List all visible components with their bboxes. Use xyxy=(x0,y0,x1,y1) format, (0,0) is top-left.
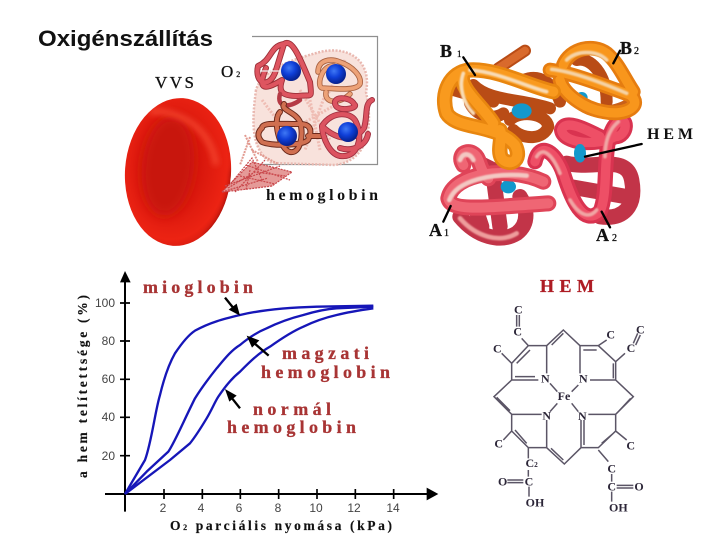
atoms: C xyxy=(525,474,533,488)
atoms: OH xyxy=(609,500,628,514)
chain: A2 xyxy=(535,121,625,216)
chain: A back xyxy=(460,163,633,238)
icon: red blood cell xyxy=(124,98,232,246)
x tick labels: 10 xyxy=(309,501,323,515)
atoms: N xyxy=(578,409,587,423)
wire tangle xyxy=(222,135,292,192)
x axis title: O 2 parciális nyomása (kPa) xyxy=(170,518,392,533)
atoms: O xyxy=(634,480,644,494)
atoms: C2 xyxy=(526,456,538,470)
atoms: Fe xyxy=(558,389,571,403)
atoms: N xyxy=(541,372,550,386)
chain: orange back xyxy=(453,51,633,137)
atoms: N xyxy=(579,372,588,386)
O2 pointer line xyxy=(260,70,291,72)
chart: oxygen dissociation curves xyxy=(75,271,438,533)
curve label: normal hemoglobin xyxy=(227,399,356,437)
y tick labels: 20 xyxy=(102,449,115,463)
bonds xyxy=(494,315,640,502)
atoms: C xyxy=(513,325,522,339)
curve label: normal hemoglobin: normál xyxy=(253,399,331,419)
title: Oxigénszállítás xyxy=(38,26,213,51)
chain: B2 xyxy=(550,48,635,113)
atoms: O xyxy=(498,474,507,488)
label pointers xyxy=(443,51,642,227)
diagram: tetrameric hemoglobin ribbon xyxy=(443,48,642,238)
atoms: C xyxy=(493,342,502,356)
x tick labels xyxy=(160,501,400,515)
heme: pointed xyxy=(574,144,586,163)
x tick labels: 8 xyxy=(275,501,282,515)
curves xyxy=(125,306,373,494)
curve label: normal hemoglobin: hemoglobin xyxy=(227,417,356,437)
atoms: C xyxy=(627,341,635,355)
x tick labels: 2 xyxy=(160,501,167,515)
label: HEM (ribbon): HEM xyxy=(647,126,693,143)
atoms: N xyxy=(542,408,551,422)
atoms: C xyxy=(606,328,615,342)
axes xyxy=(105,271,438,512)
y tick labels xyxy=(95,296,115,463)
y tick labels: 100 xyxy=(95,296,115,310)
diagram: heme structural formula xyxy=(493,303,645,514)
mesh backdrop xyxy=(253,50,369,165)
heading: HEM: HEM xyxy=(540,276,594,296)
curve label: magzati hemoglobin: magzati xyxy=(282,343,369,363)
label: A1: A1 xyxy=(429,220,449,240)
label: A2: A 2 xyxy=(596,225,617,245)
heme groups xyxy=(501,92,588,193)
x tick labels: 14 xyxy=(386,501,400,515)
chain: B1 xyxy=(445,70,553,162)
label: B2: B2 xyxy=(620,38,639,58)
y tick labels: 40 xyxy=(102,410,115,424)
ribbon: top-right chain xyxy=(318,60,360,101)
atoms: C xyxy=(494,437,503,451)
oxygen-binding balls xyxy=(277,61,358,146)
curve label: magzati hemoglobin xyxy=(261,343,390,382)
atoms: C xyxy=(626,438,635,452)
x tick labels: 12 xyxy=(347,501,361,515)
y tick labels: 60 xyxy=(102,372,115,386)
atoms: OH xyxy=(526,495,545,509)
y tick labels: 80 xyxy=(102,334,115,348)
arrows xyxy=(225,298,269,408)
atoms: C xyxy=(636,322,645,336)
icon: hemoglobin box with molecule xyxy=(222,36,378,192)
curve label: magzati hemoglobin: hemoglobin xyxy=(261,362,390,382)
ribbon: bottom-right chain xyxy=(322,98,372,156)
chain: A1 xyxy=(448,152,548,208)
x tick labels: 4 xyxy=(198,501,205,515)
curve label: mioglobin: mioglobin xyxy=(143,277,253,297)
atoms xyxy=(493,303,645,514)
label: VVS: VVS xyxy=(155,73,194,92)
atoms: C xyxy=(607,462,616,476)
label: hemoglobin: hemoglobin xyxy=(266,187,378,204)
ribbon: top-left chain xyxy=(257,43,311,105)
label: O2: O 2 xyxy=(221,62,240,81)
atoms: C xyxy=(514,303,523,317)
molecule frame xyxy=(250,36,378,164)
y axis title: a hem telítettsége (%) xyxy=(75,295,90,478)
x tick labels: 6 xyxy=(236,501,243,515)
label: B1: B 1 xyxy=(440,41,462,61)
ribbon: bottom-left chain xyxy=(258,104,322,152)
atoms: C xyxy=(607,480,616,494)
